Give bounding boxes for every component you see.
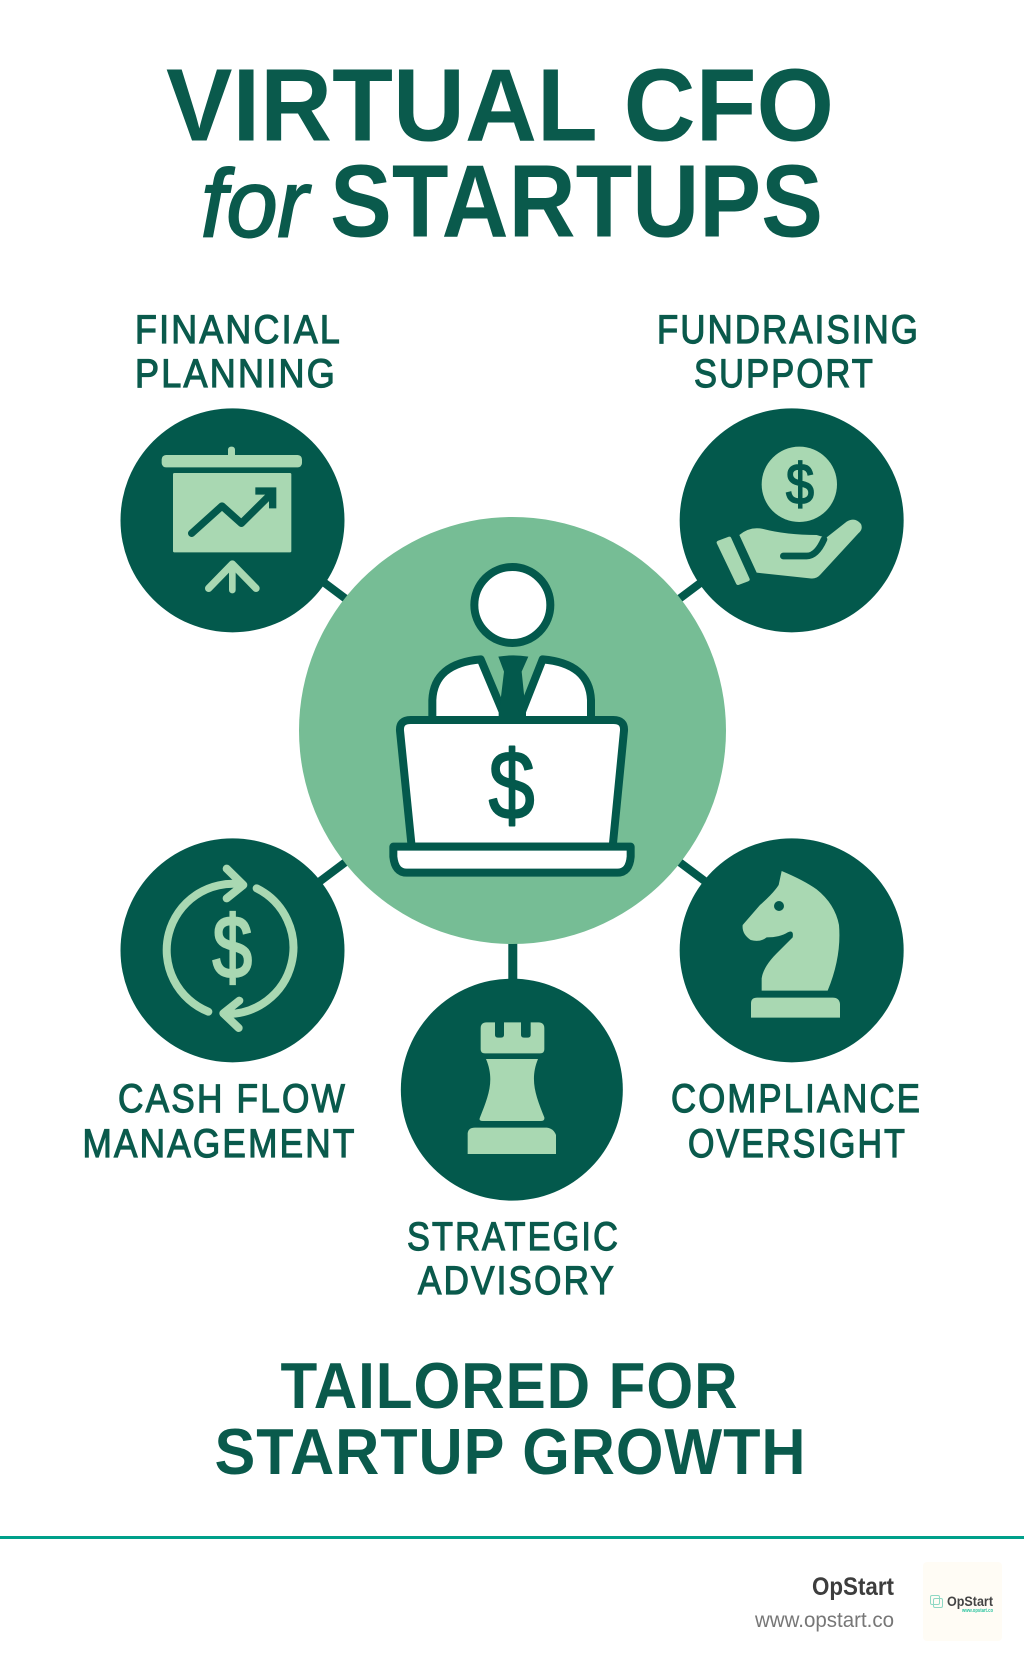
icon: presentation board with rising chart xyxy=(120,408,344,632)
icon: circular arrows around dollar xyxy=(120,838,344,1062)
footer brand text: OpStart xyxy=(812,1573,895,1601)
label: strategic advisory: STRATEGIC xyxy=(407,1215,620,1259)
central circle: virtual CFO at laptop xyxy=(299,517,726,944)
footer rule xyxy=(0,1536,1024,1539)
tagline xyxy=(214,1349,806,1488)
icon: person with laptop xyxy=(393,567,631,873)
icon: chess knight xyxy=(680,838,904,1062)
label: fundraising support: FUNDRAISING xyxy=(657,308,920,352)
panel: strategic advisory xyxy=(401,979,623,1303)
tagline: STARTUP GROWTH xyxy=(214,1415,806,1488)
footer logo: OpStart xyxy=(947,1593,993,1609)
panel: fundraising support xyxy=(657,308,920,632)
icon: person with laptop: $ xyxy=(489,730,535,839)
label: fundraising support xyxy=(657,308,920,396)
panel: cash flow management xyxy=(82,838,356,1166)
connector lines xyxy=(319,581,706,982)
icon: chess rook xyxy=(401,979,623,1201)
label: cash flow management xyxy=(82,1077,356,1166)
label: financial planning: FINANCIAL xyxy=(135,308,342,352)
title xyxy=(166,48,834,258)
title: for xyxy=(201,150,312,258)
label: fundraising support: SUPPORT xyxy=(694,352,875,396)
footer logo xyxy=(923,1562,1002,1641)
label: financial planning xyxy=(135,308,342,396)
label: compliance oversight xyxy=(671,1077,922,1166)
icon: circular arrows around dollar: $ xyxy=(213,898,252,997)
label: strategic advisory: ADVISORY xyxy=(418,1259,616,1303)
title: STARTUPS xyxy=(330,144,823,258)
icon: hand holding coin: $ xyxy=(786,453,814,517)
tagline: TAILORED FOR xyxy=(280,1349,738,1422)
label: financial planning: PLANNING xyxy=(135,352,337,396)
panel: compliance oversight xyxy=(671,838,922,1166)
footer brand text xyxy=(754,1573,895,1632)
label: strategic advisory xyxy=(407,1215,620,1303)
footer brand text: www.opstart.co xyxy=(754,1609,894,1632)
panel: financial planning xyxy=(120,308,344,632)
footer logo: www.opstart.co xyxy=(961,1608,993,1614)
label: compliance oversight: OVERSIGHT xyxy=(688,1122,907,1166)
icon: hand holding coin xyxy=(680,408,904,632)
title: VIRTUAL CFO xyxy=(166,48,834,162)
label: cash flow management: CASH FLOW xyxy=(118,1077,347,1121)
label: cash flow management: MANAGEMENT xyxy=(82,1122,356,1166)
label: compliance oversight: COMPLIANCE xyxy=(671,1077,922,1121)
